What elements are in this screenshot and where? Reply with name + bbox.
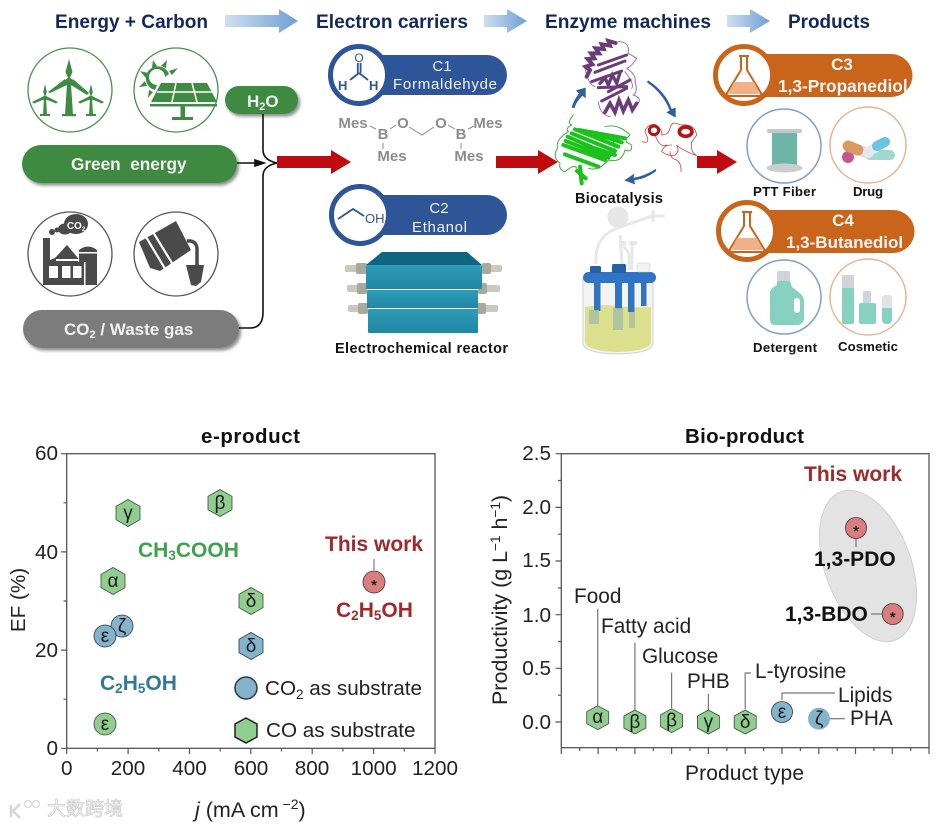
pill: Green energy [22, 145, 237, 183]
marker: beta [208, 490, 232, 516]
arrow: header 1 [225, 9, 298, 33]
bioreactor [583, 206, 665, 354]
icon: waste gas tank pouring [134, 212, 218, 296]
icon: factory with CO2 cloud: 2 [82, 227, 86, 233]
chart: e-product scatter [7, 425, 458, 822]
marker: zeta [111, 615, 133, 637]
marker: 1,3-BDO [882, 604, 903, 626]
product labels: Food [574, 585, 621, 608]
label: C2H5OH red: C [336, 599, 351, 622]
marker: beta 2 [661, 709, 683, 733]
marker: epsilon blue [94, 625, 116, 647]
arrow: header 3 [727, 9, 770, 33]
arrow: red 1 [277, 150, 351, 174]
pill: C2 Ethanol: OH [365, 211, 384, 226]
icon: factory with CO2 cloud [28, 212, 112, 296]
product labels: Glucose [642, 645, 718, 668]
chemical structure: Mes-B-O-CH2-O-B-Mes: Mes [338, 115, 368, 132]
pill: H2O [225, 86, 298, 114]
marker: 1,3-PDO: * [853, 523, 859, 540]
chemical structure: Mes-B-O-CH2-O-B-Mes: B [456, 126, 467, 143]
label: C2H5OH red: H [359, 599, 374, 622]
protein: purple [585, 41, 639, 117]
legend: CO2 as substrate: CO [265, 677, 296, 700]
header: Enzyme machines: Enzyme machines [545, 11, 711, 33]
marker: gamma [697, 710, 719, 734]
x axis label: Product type [685, 762, 804, 785]
arrow: red 2 [496, 150, 558, 174]
pill: C1 Formaldehyde: H [338, 78, 347, 93]
pill: Green energy: Green energy [71, 154, 187, 174]
header: Products: Products [788, 11, 870, 33]
marker: gamma: γ [123, 503, 133, 524]
icon: wind turbines [28, 48, 112, 132]
legend: CO2 as substrate: as substrate [304, 677, 422, 700]
highlight ellipse [801, 477, 935, 655]
marker: delta [734, 710, 756, 734]
marker: zeta: ζ [815, 709, 824, 730]
product labels: Fatty acid [601, 615, 691, 638]
label: C2H5OH red: OH [381, 599, 413, 622]
pill: C4 1,3-Butanediol [718, 202, 915, 260]
x tick labels: 400 [172, 757, 207, 780]
watermark: 大数跨境 [47, 798, 123, 820]
pill: C2 Ethanol: C2 [429, 200, 449, 217]
y tick labels: 1.0 [522, 604, 551, 627]
label: CH3COOH: 3 [168, 548, 176, 563]
marker: gamma [116, 500, 140, 526]
marker: delta blue [239, 632, 263, 660]
pill: H2O: 2 [259, 101, 265, 113]
pill: C3 1,3-Propanediol: C3 [831, 55, 853, 74]
chemical structure: Mes-B-O-CH2-O-B-Mes [338, 115, 503, 165]
chemical structure: Mes-B-O-CH2-O-B-Mes: B [378, 126, 389, 143]
marker: this work [363, 559, 385, 594]
marker: alpha: α [108, 571, 119, 592]
arrows: cycle [572, 80, 676, 184]
marker: epsilon green: ε [101, 714, 110, 735]
label: 1,3-BDO: 1,3-BDO [785, 603, 868, 626]
marker: epsilon green [94, 713, 116, 735]
label: C2H5OH red: 2 [351, 608, 359, 623]
marker: alpha [101, 568, 125, 594]
label: PTT Fiber: PTT Fiber [753, 184, 816, 199]
x tick labels: 800 [295, 757, 329, 780]
label: C2H5OH blue: OH [145, 672, 177, 695]
x tick labels: 1200 [412, 757, 458, 780]
icon: cosmetic bottles [830, 259, 906, 335]
pill: C3 1,3-Propanediol: 1,3-Propanediol [778, 76, 908, 96]
marker: 1,3-PDO [846, 518, 866, 540]
label: Detergent: Detergent [753, 340, 818, 355]
icon: detergent bottle [747, 260, 821, 334]
icon: solar panel [134, 48, 218, 132]
x axis label: −2 [279, 796, 299, 812]
x tick labels [61, 757, 458, 780]
y tick labels: 2.0 [522, 496, 551, 519]
marker: gamma: γ [704, 712, 714, 733]
y axis label: h [488, 518, 512, 535]
pill: C2 Ethanol: Ethanol [412, 219, 467, 236]
y tick labels: 0 [46, 737, 58, 760]
legend: CO2 as substrate: 2 [296, 687, 304, 702]
electrochemical reactor [345, 252, 502, 333]
pill: C1 Formaldehyde [330, 46, 507, 104]
marker: beta 1: β [629, 712, 640, 733]
header: Energy + Carbon: Energy + Carbon [55, 11, 208, 33]
icon: PTT fiber spool [747, 109, 821, 183]
arrow: header 2 [484, 9, 527, 33]
y tick labels: 0.0 [522, 711, 551, 734]
chemical structure: Mes-B-O-CH2-O-B-Mes: Mes [473, 115, 503, 132]
pill: CO2 / Waste gas: CO [64, 320, 90, 339]
icon: drug capsules [830, 107, 906, 183]
label: This work: This work [804, 463, 902, 486]
product labels [574, 585, 893, 730]
pill: H2O: O [265, 92, 279, 111]
label: C2H5OH blue: 2 [115, 681, 123, 696]
pill: C1 Formaldehyde: H [369, 78, 378, 93]
label: C2H5OH red: 5 [374, 608, 382, 623]
pill: C1 Formaldehyde: C1 [432, 58, 452, 75]
marker: this work: * [371, 577, 377, 594]
x tick labels: 200 [111, 757, 145, 780]
chemical structure: Mes-B-O-CH2-O-B-Mes: Mes [454, 148, 484, 165]
y tick labels: 2.5 [522, 442, 551, 465]
label: CH3COOH: COOH [176, 539, 239, 562]
pill: C4 1,3-Butanediol: 1,3-Butanediol [786, 233, 903, 252]
y tick labels: 40 [35, 541, 58, 564]
label: Biocatalysis: Biocatalysis [575, 191, 663, 207]
label: Electrochemical reactor: Electrochemical reactor [335, 341, 508, 357]
y axis label: EF (%) [7, 568, 30, 632]
marker: delta green [239, 588, 263, 614]
legend: CO as substrate: CO as substrate [266, 719, 415, 742]
chemical structure: Mes-B-O-CH2-O-B-Mes: O [397, 115, 409, 132]
y axis label: Productivity (g L [488, 551, 512, 705]
y tick labels: 0.5 [522, 657, 551, 680]
y tick labels [522, 442, 551, 734]
label: 1,3-PDO: 1,3-PDO [814, 548, 896, 571]
product labels: PHA [850, 707, 893, 730]
chemical structure: Mes-B-O-CH2-O-B-Mes: O [435, 115, 447, 132]
marker: 1,3-BDO: * [890, 609, 896, 626]
connector lines [237, 114, 277, 328]
chart title: Bio-product: Bio-product [685, 425, 804, 448]
pill: C4 1,3-Butanediol: C4 [832, 211, 854, 230]
label: C2H5OH blue: H [123, 672, 138, 695]
x tick labels: 0 [61, 757, 72, 780]
marker: epsilon [772, 702, 792, 723]
pill: C1 Formaldehyde: Formaldehyde [393, 76, 497, 93]
marker: beta 1 [624, 710, 646, 734]
product labels: PHB [687, 670, 730, 693]
marker: delta: δ [740, 712, 750, 733]
product labels: L-tyrosine [755, 660, 846, 683]
label: C2H5OH blue: 5 [138, 681, 146, 696]
leader lines [598, 538, 882, 719]
protein: red [642, 123, 697, 172]
label: Cosmetic: Cosmetic [838, 339, 898, 354]
y axis label: −1 [488, 535, 503, 551]
pill: CO2 / Waste gas: / Waste gas [96, 320, 193, 339]
y tick labels [35, 442, 58, 760]
marker: delta green: δ [246, 591, 256, 612]
marker: alpha: α [592, 707, 603, 728]
pill: C3 1,3-Propanediol [716, 46, 912, 104]
x tick labels: 1000 [351, 757, 397, 780]
label: This work: This work [325, 533, 423, 556]
proteins: enzyme cycle [555, 41, 697, 184]
chart title: e-product: e-product [201, 425, 300, 448]
chemical structure: Mes-B-O-CH2-O-B-Mes: Mes [377, 148, 407, 165]
header: Electron carriers: Electron carriers [316, 11, 468, 33]
x axis label: ) [298, 798, 306, 822]
pill: H2O: H [247, 92, 259, 111]
x axis label: j (mA cm [195, 798, 279, 822]
y tick labels: 60 [35, 442, 58, 465]
pill: C2 Ethanol [332, 186, 507, 244]
product labels: Lipids [838, 684, 892, 707]
x tick labels: 600 [234, 757, 268, 780]
legend: CO2 as substrate [235, 677, 422, 702]
chart: Bio-product [488, 425, 935, 785]
marker: alpha [587, 706, 609, 730]
pill: C1 Formaldehyde: O [354, 51, 364, 65]
label: Drug: Drug [853, 184, 883, 199]
y tick labels: 20 [35, 639, 58, 662]
icon: factory with CO2 cloud: CO [67, 221, 82, 232]
marker: delta blue: δ [246, 636, 256, 657]
marker: zeta [808, 708, 830, 730]
marker: zeta: ζ [118, 616, 127, 637]
arrow: red 3 [697, 150, 737, 174]
label: C2H5OH blue: C [100, 672, 115, 695]
y axis label: −1 [488, 502, 503, 518]
y tick labels: 1.5 [522, 549, 551, 572]
watermark [11, 798, 123, 820]
protein: green [555, 115, 632, 183]
marker: epsilon blue: ε [101, 626, 110, 647]
pill: CO2 / Waste gas: 2 [90, 329, 96, 341]
marker: epsilon: ε [778, 702, 787, 723]
label: CH3COOH: CH [138, 539, 168, 562]
pill: CO2 / Waste gas [23, 310, 239, 348]
y axis label: ) [488, 495, 512, 502]
marker: beta 2: β [666, 711, 677, 732]
marker: beta: β [215, 493, 226, 514]
